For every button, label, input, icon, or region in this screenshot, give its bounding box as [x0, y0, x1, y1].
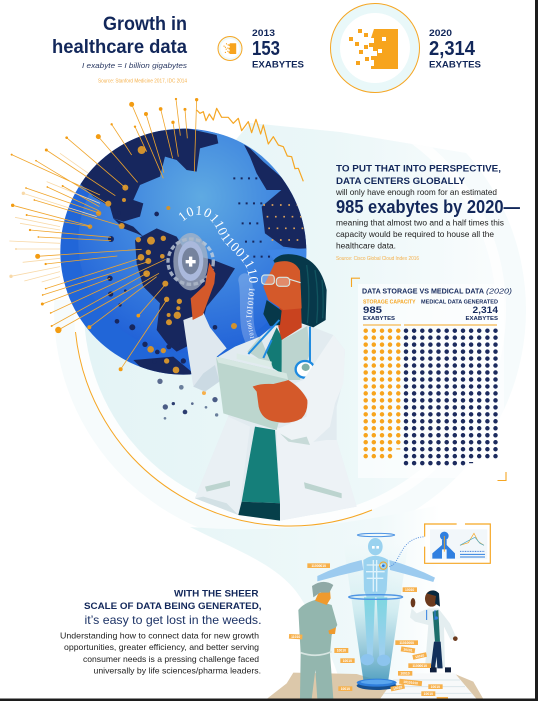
- binary tags: 10010: [431, 685, 440, 689]
- right sleeve: [275, 335, 345, 445]
- 2013 stat: 153: [252, 38, 280, 60]
- bottom text block: it’s easy to get lost in the weeds.: [84, 613, 262, 627]
- paper on floor: [380, 673, 477, 699]
- binary data stream: 100101: [246, 320, 254, 339]
- binary data stream: [178, 206, 258, 342]
- binary tags: 10010: [424, 692, 433, 696]
- face: [263, 261, 302, 310]
- globe with data lines: [9, 98, 306, 420]
- binary tags: 10010: [415, 653, 425, 659]
- perspective body: [336, 218, 504, 250]
- binary tags: 11000010: [412, 664, 427, 668]
- perspective text block: will only have enough room for an estimated: [335, 188, 497, 197]
- icon: small data circle: [218, 36, 242, 60]
- storage capacity label: 985: [363, 305, 383, 316]
- map: continents: [80, 128, 310, 380]
- stethoscope: [248, 320, 314, 378]
- chart year: (2020): [486, 288, 512, 295]
- binary tags: 10101: [403, 647, 413, 653]
- 2020 stat: EXABYTES: [429, 60, 481, 70]
- perspective heading: [336, 164, 501, 186]
- binary tags: 11010000: [399, 641, 414, 645]
- hologram body: [317, 538, 435, 666]
- pockets: [205, 481, 342, 498]
- bottom body: Understanding how to connect data for new growth: [60, 632, 259, 641]
- tablet: [216, 353, 288, 430]
- perspective body: healthcare data.: [336, 241, 396, 250]
- 2020 stat: [429, 28, 481, 70]
- floor: [267, 673, 483, 699]
- binary tags: 10010: [400, 672, 410, 676]
- raised arm sleeve: [183, 313, 227, 392]
- chart frame brackets: [352, 278, 506, 480]
- hologram scene: [267, 524, 490, 699]
- binary tags: 11010: [291, 635, 300, 639]
- neck: [278, 300, 302, 340]
- hologram light cone: [343, 543, 408, 680]
- perspective text block: [335, 164, 520, 262]
- man figure: [298, 582, 337, 699]
- coat body: [195, 322, 357, 521]
- data lines: [9, 98, 198, 371]
- storage capacity label: [363, 300, 416, 322]
- bottom body: opportunities, greater efficiency, and better serving: [64, 643, 259, 652]
- storage capacity label: EXABYTES: [363, 316, 395, 322]
- perspective heading: TO PUT THAT INTO PERSPECTIVE,: [336, 164, 501, 174]
- icon: large data circle: [330, 4, 420, 92]
- woman figure: [410, 590, 458, 672]
- chart title: DATA STORAGE VS MEDICAL DATA: [362, 286, 485, 295]
- binary data stream: 101011011001110: [178, 206, 258, 283]
- binary tags: [289, 563, 448, 699]
- bottom body: consumer needs is a pressing challenge faced: [83, 655, 259, 664]
- storage capacity label: STORAGE CAPACITY: [363, 300, 416, 306]
- medical data dots: [406, 331, 496, 464]
- holding hand: [253, 380, 307, 423]
- perspective body: meaning that almost two and a half times this: [336, 218, 504, 227]
- scan target: [380, 537, 425, 569]
- key figure: 985 exabytes by 2020—: [336, 197, 520, 217]
- medical data label: 2,314: [472, 305, 499, 316]
- binary tags: 10010: [393, 685, 403, 691]
- 2020 stat: 2,314: [429, 38, 476, 60]
- binary tags: 10010: [337, 649, 346, 653]
- exabyte definition: I exabyte = I billion gigabytes: [82, 63, 188, 70]
- projector base: [357, 679, 397, 690]
- hologram rings: [349, 533, 403, 599]
- binary tags: 10010: [405, 588, 414, 592]
- title: Growth in: [103, 13, 187, 35]
- perspective heading: DATA CENTERS GLOBALLY: [336, 176, 465, 186]
- background circles: [54, 123, 526, 529]
- title: healthcare data: [52, 36, 187, 58]
- perspective text block: Source: Cisco Global Cloud Index 2016: [336, 256, 419, 262]
- lower background shape: [190, 505, 440, 699]
- bottom body: [60, 632, 261, 675]
- inset lung chart: [425, 524, 490, 563]
- dots below globe: [157, 379, 230, 420]
- glasses: [262, 275, 301, 286]
- bottom heading: WITH THE SHEER: [174, 589, 259, 599]
- binary tags: 10101010: [403, 680, 418, 685]
- heartbeat line: [197, 108, 303, 181]
- 2013 stat: 2013: [252, 28, 275, 39]
- medical data label: MEDICAL DATA GENERATED: [421, 300, 498, 306]
- binary tags: 10010: [343, 659, 352, 663]
- title: [52, 13, 187, 58]
- medical data label: [421, 300, 499, 322]
- medical data label: EXABYTES: [466, 316, 498, 322]
- storage dots: [366, 331, 400, 458]
- map: data scatter: [233, 177, 270, 258]
- touch interface icon: [168, 233, 213, 290]
- bottom heading: SCALE OF DATA BEING GENERATED,: [84, 601, 262, 611]
- bottom text block: [60, 589, 262, 675]
- lapels: [247, 326, 310, 380]
- data storage chart panel: [352, 278, 512, 480]
- 2020 stat: 2020: [429, 28, 452, 39]
- hair: [263, 254, 327, 327]
- bottom body: universally by life sciences/pharma leaders.: [94, 666, 261, 675]
- perspective body: capacity would be required to house all the: [336, 230, 495, 239]
- scrubs: [238, 327, 283, 521]
- 2013 stat: EXABYTES: [252, 60, 304, 70]
- raised hand: [191, 263, 215, 320]
- bottom heading: [84, 589, 262, 611]
- map: data points: [88, 146, 237, 373]
- doctor illustration: [183, 254, 357, 521]
- source note: Source: Stanford Medicine 2017, IDC 2014: [98, 78, 187, 84]
- 2013 stat: [252, 28, 304, 70]
- binary tags: 11000010: [311, 564, 326, 568]
- binary tags: 10010: [341, 687, 350, 691]
- binary data stream: 1010101: [246, 288, 255, 318]
